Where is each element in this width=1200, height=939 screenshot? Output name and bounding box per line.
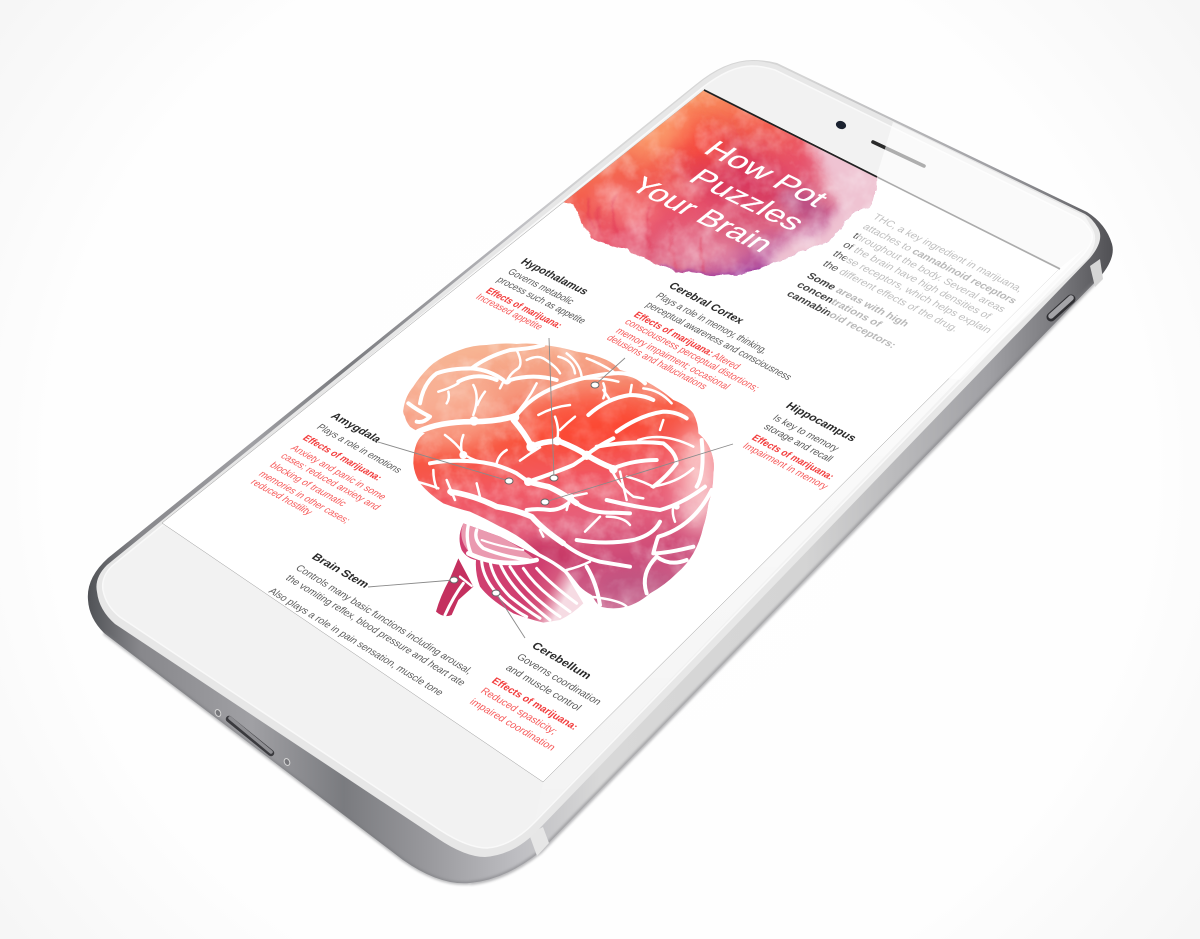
leader: amygdala [378,442,513,484]
callout: hypothalamus: Governs metabolic [505,268,576,307]
text: intro: Some areas with high [804,272,911,329]
mic hole right [283,758,291,766]
text: intro [784,213,1025,351]
title [623,136,835,257]
callout: hypothalamus: Hypothalamus [518,257,591,297]
callout: hippocampus: Is key to memory [770,414,842,454]
callout: cerebral cortex [604,281,794,393]
leader: cerebellum [492,590,525,638]
callout: amygdala [248,411,405,526]
brain stem [436,558,473,616]
volume button [1051,298,1071,317]
callout: amygdala: reduced hostility [248,477,316,517]
mic hole left [214,709,222,717]
callout: cerebral cortex: delusions and hallucinations [604,334,709,392]
leader: hypothalamus [549,338,558,481]
cerebellum [460,523,583,623]
callout: cerebellum: and muscle control [503,663,583,713]
callout: hippocampus: storage and recall [761,423,835,464]
text: intro: the different effects of the drug. [820,260,961,334]
leader lines and markers [368,338,733,638]
leader: brain stem [368,577,458,587]
phone: front face [96,61,1100,857]
leader: hippocampus [541,444,733,505]
callout: amygdala: blocking of traumatic [267,460,349,508]
brain folds [408,345,712,607]
callout: cerebellum: impaired coordination [467,697,557,753]
charging port [229,718,271,753]
callout: brain stem: Brain Stem [309,552,371,590]
blob edge on top bezel [704,90,877,177]
callout: cerebellum: Cerebellum [529,641,594,682]
title: Puzzles [682,164,812,236]
text: intro: attaches to cannabinoid receptors [860,223,1019,306]
callout: brain stem: Controls many basic functions including arousal, [293,564,474,676]
callout: cerebral cortex: memory impairment; occasional [613,327,732,392]
callout: cerebral cortex: Effects of marijuana: Altered [631,311,742,372]
callout: cerebral cortex: Cerebral Cortex [666,281,747,326]
callout: hypothalamus: process such as appetite [494,276,588,326]
callout: hypothalamus: Increased appetite [473,293,545,332]
speaker [873,142,924,166]
callout: cerebral cortex: consciousness perceptual distortions; [622,318,761,393]
callout: hypothalamus: Effects of marijuana: [483,287,564,331]
callout: brain stem: the vomiting reflex, blood pressure and heart rate [283,574,467,688]
title: How Pot [697,136,835,212]
callout: hippocampus [740,401,859,492]
title: Your Brain [623,172,781,257]
callout: cerebral cortex: perceptual awareness and consciousness [643,301,794,382]
leader: cerebral cortex [591,358,625,388]
cerebellum and stem folds [445,525,577,620]
callout: amygdala: Anxiety and panic in some [288,443,389,502]
phone: device body [88,60,1113,883]
phone screen [162,90,1060,782]
antenna band: bottom right [529,827,549,856]
brain illustration [395,335,725,623]
callout: amygdala: Effects of marijuana: [300,433,385,483]
callout: hippocampus: Hippocampus [783,401,859,444]
text: intro: of the brain have high densities of [840,241,993,321]
callout: amygdala: cases; reduced anxiety and [278,451,383,512]
callout: amygdala: Plays a role in emotions [314,422,405,475]
callout: brain stem: Also plays a role in pain sensation, muscle tone [266,587,445,698]
text: intro: these receptors, which helps explain [830,250,994,336]
watercolor title blob [564,90,878,276]
antenna band: top right [1090,259,1103,287]
text: intro: cannabinoid receptors: [784,290,898,351]
callout: cerebellum: Reduced spasticity; [478,686,559,737]
text: intro: throughout the body. Several areas [850,232,1008,315]
callout: cerebellum: Effects of marijuana: [489,676,580,732]
cerebrum [403,344,714,608]
text: intro: concentrations of [794,281,884,330]
glass glare overlay [828,122,1095,380]
callout: hypothalamus [473,257,591,332]
text: intro: THC, a key ingredient in marijuana, [870,213,1025,294]
callout: cerebellum: Governs coordination [514,652,603,707]
screen top edge [704,90,1060,269]
callout: hippocampus: Impairment in memory [740,442,831,492]
cerebrum gap [463,508,597,607]
callout: cerebral cortex: Plays a role in memory, thinking, [653,292,770,356]
callout: amygdala: Amygdala [328,411,384,445]
callout: cerebellum [467,641,603,753]
callout: amygdala: memories in other cases; [256,469,353,526]
callout: hippocampus: Effects of marijuana: [749,434,836,482]
camera [835,119,847,131]
